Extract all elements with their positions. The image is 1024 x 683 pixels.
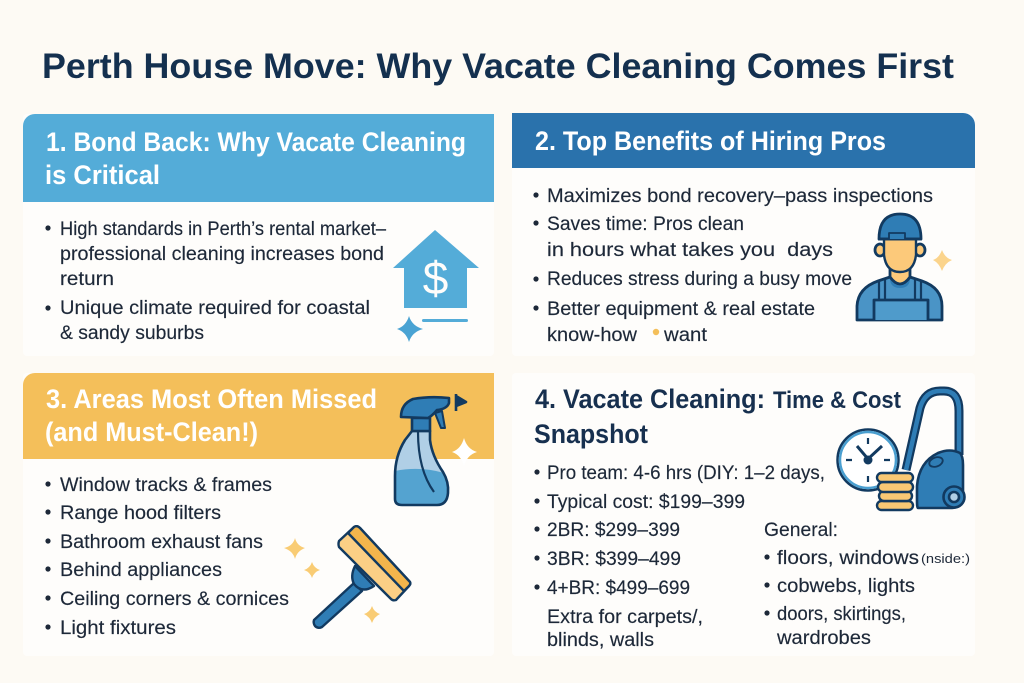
icon: cleaner worker [857, 214, 942, 320]
header: panel 2: 2. Top Benefits of Hiring Pros [535, 126, 886, 156]
list: time and prices: Typical cost: $199–399 [547, 492, 745, 513]
list: panel 3 bullets: Behind appliances [60, 560, 222, 581]
icon: yellow sparkles [284, 538, 380, 623]
panel: time and cost [512, 373, 975, 656]
icon: house with dollar: $ [423, 252, 448, 304]
heading: panel 4: Snapshot [534, 419, 648, 449]
heading: panel 4: 4. Vacate Cleaning: [535, 384, 765, 414]
icon: vacuum cleaner [906, 391, 964, 508]
list: panel 2 bullets: Reduces stress during a busy move [547, 269, 852, 290]
heading: panel 4 [534, 384, 901, 449]
header: panel 1: is Critical [45, 160, 160, 190]
list: general: (nside:) [921, 551, 970, 566]
icon: white sparkle [452, 438, 477, 466]
header: panel 3 [23, 373, 494, 459]
icon: clock [838, 430, 898, 490]
title: Perth House Move: Why Vacate Cleaning Comes First [42, 47, 954, 86]
icon: sparkle [933, 250, 952, 271]
icon: house with dollar [393, 230, 479, 342]
list: general: cobwebs, lights [777, 576, 915, 597]
list: panel 2 bullets: Saves time: Pros clean [547, 214, 744, 235]
list: panel 3 bullets: Range hood filters [60, 503, 221, 524]
list: time and prices: 4+BR: $499–699 [547, 578, 690, 599]
list: panel 1 bullets: & sandy suburbs [60, 323, 204, 344]
list: panel 3 bullets: Bathroom exhaust fans [60, 532, 263, 553]
icon: squeegee [314, 526, 410, 628]
list: panel 2 bullets: want [663, 325, 708, 346]
list: time and prices: Pro team: 4-6 hrs (DIY: 1–2 days, [547, 463, 825, 484]
list: panel 2 bullets: Better equipment & real estate [547, 299, 815, 320]
list: time and prices: 2BR: $299–399 [547, 520, 680, 541]
list: general: doors, skirtings, [777, 604, 906, 625]
icon: coin stack [877, 473, 913, 510]
list: panel 2 bullets [533, 186, 933, 346]
panel: areas missed [23, 373, 494, 656]
list: panel 3 bullets [45, 475, 289, 639]
list: panel 1 bullets [45, 219, 386, 344]
list: time and prices: 3BR: $399–499 [547, 549, 681, 570]
header: panel 3: (and Must-Clean!) [45, 417, 258, 447]
list: panel 1 bullets: Unique climate required for coastal [60, 298, 370, 319]
list: panel 2 bullets: in hours what takes you days [547, 240, 833, 261]
panel: top benefits [512, 113, 975, 356]
header: panel 1 [23, 114, 494, 202]
list: general [764, 520, 970, 649]
list: panel 3 bullets: Ceiling corners & cornices [60, 589, 289, 610]
icon: spray bottle [395, 394, 466, 505]
heading: panel 4: Time & Cost [773, 387, 901, 414]
list: time and prices: Extra for carpets/, [547, 607, 703, 628]
list: panel 3 bullets: Window tracks & frames [60, 475, 272, 496]
list: time and prices [534, 463, 825, 651]
list: panel 1 bullets: High standards in Perth’s rental market– [60, 219, 386, 240]
list: panel 1 bullets: return [60, 269, 114, 290]
list: general: wardrobes [776, 628, 871, 649]
list: general: General: [764, 520, 838, 541]
header: panel 2 [512, 113, 975, 168]
list: general: floors, windows [777, 548, 919, 569]
header: panel 1: 1. Bond Back: Why Vacate Cleaning [46, 127, 466, 157]
list: panel 3 bullets: Light fixtures [60, 618, 176, 639]
list: time and prices: blinds, walls [547, 630, 654, 651]
header: panel 3: 3. Areas Most Often Missed [46, 384, 377, 414]
list: panel 2 bullets: know-how [547, 325, 637, 346]
list: panel 1 bullets: professional cleaning increases bond [60, 244, 384, 265]
list: panel 2 bullets: Maximizes bond recovery–pass inspections [547, 186, 933, 207]
panel: bond back [23, 114, 494, 356]
